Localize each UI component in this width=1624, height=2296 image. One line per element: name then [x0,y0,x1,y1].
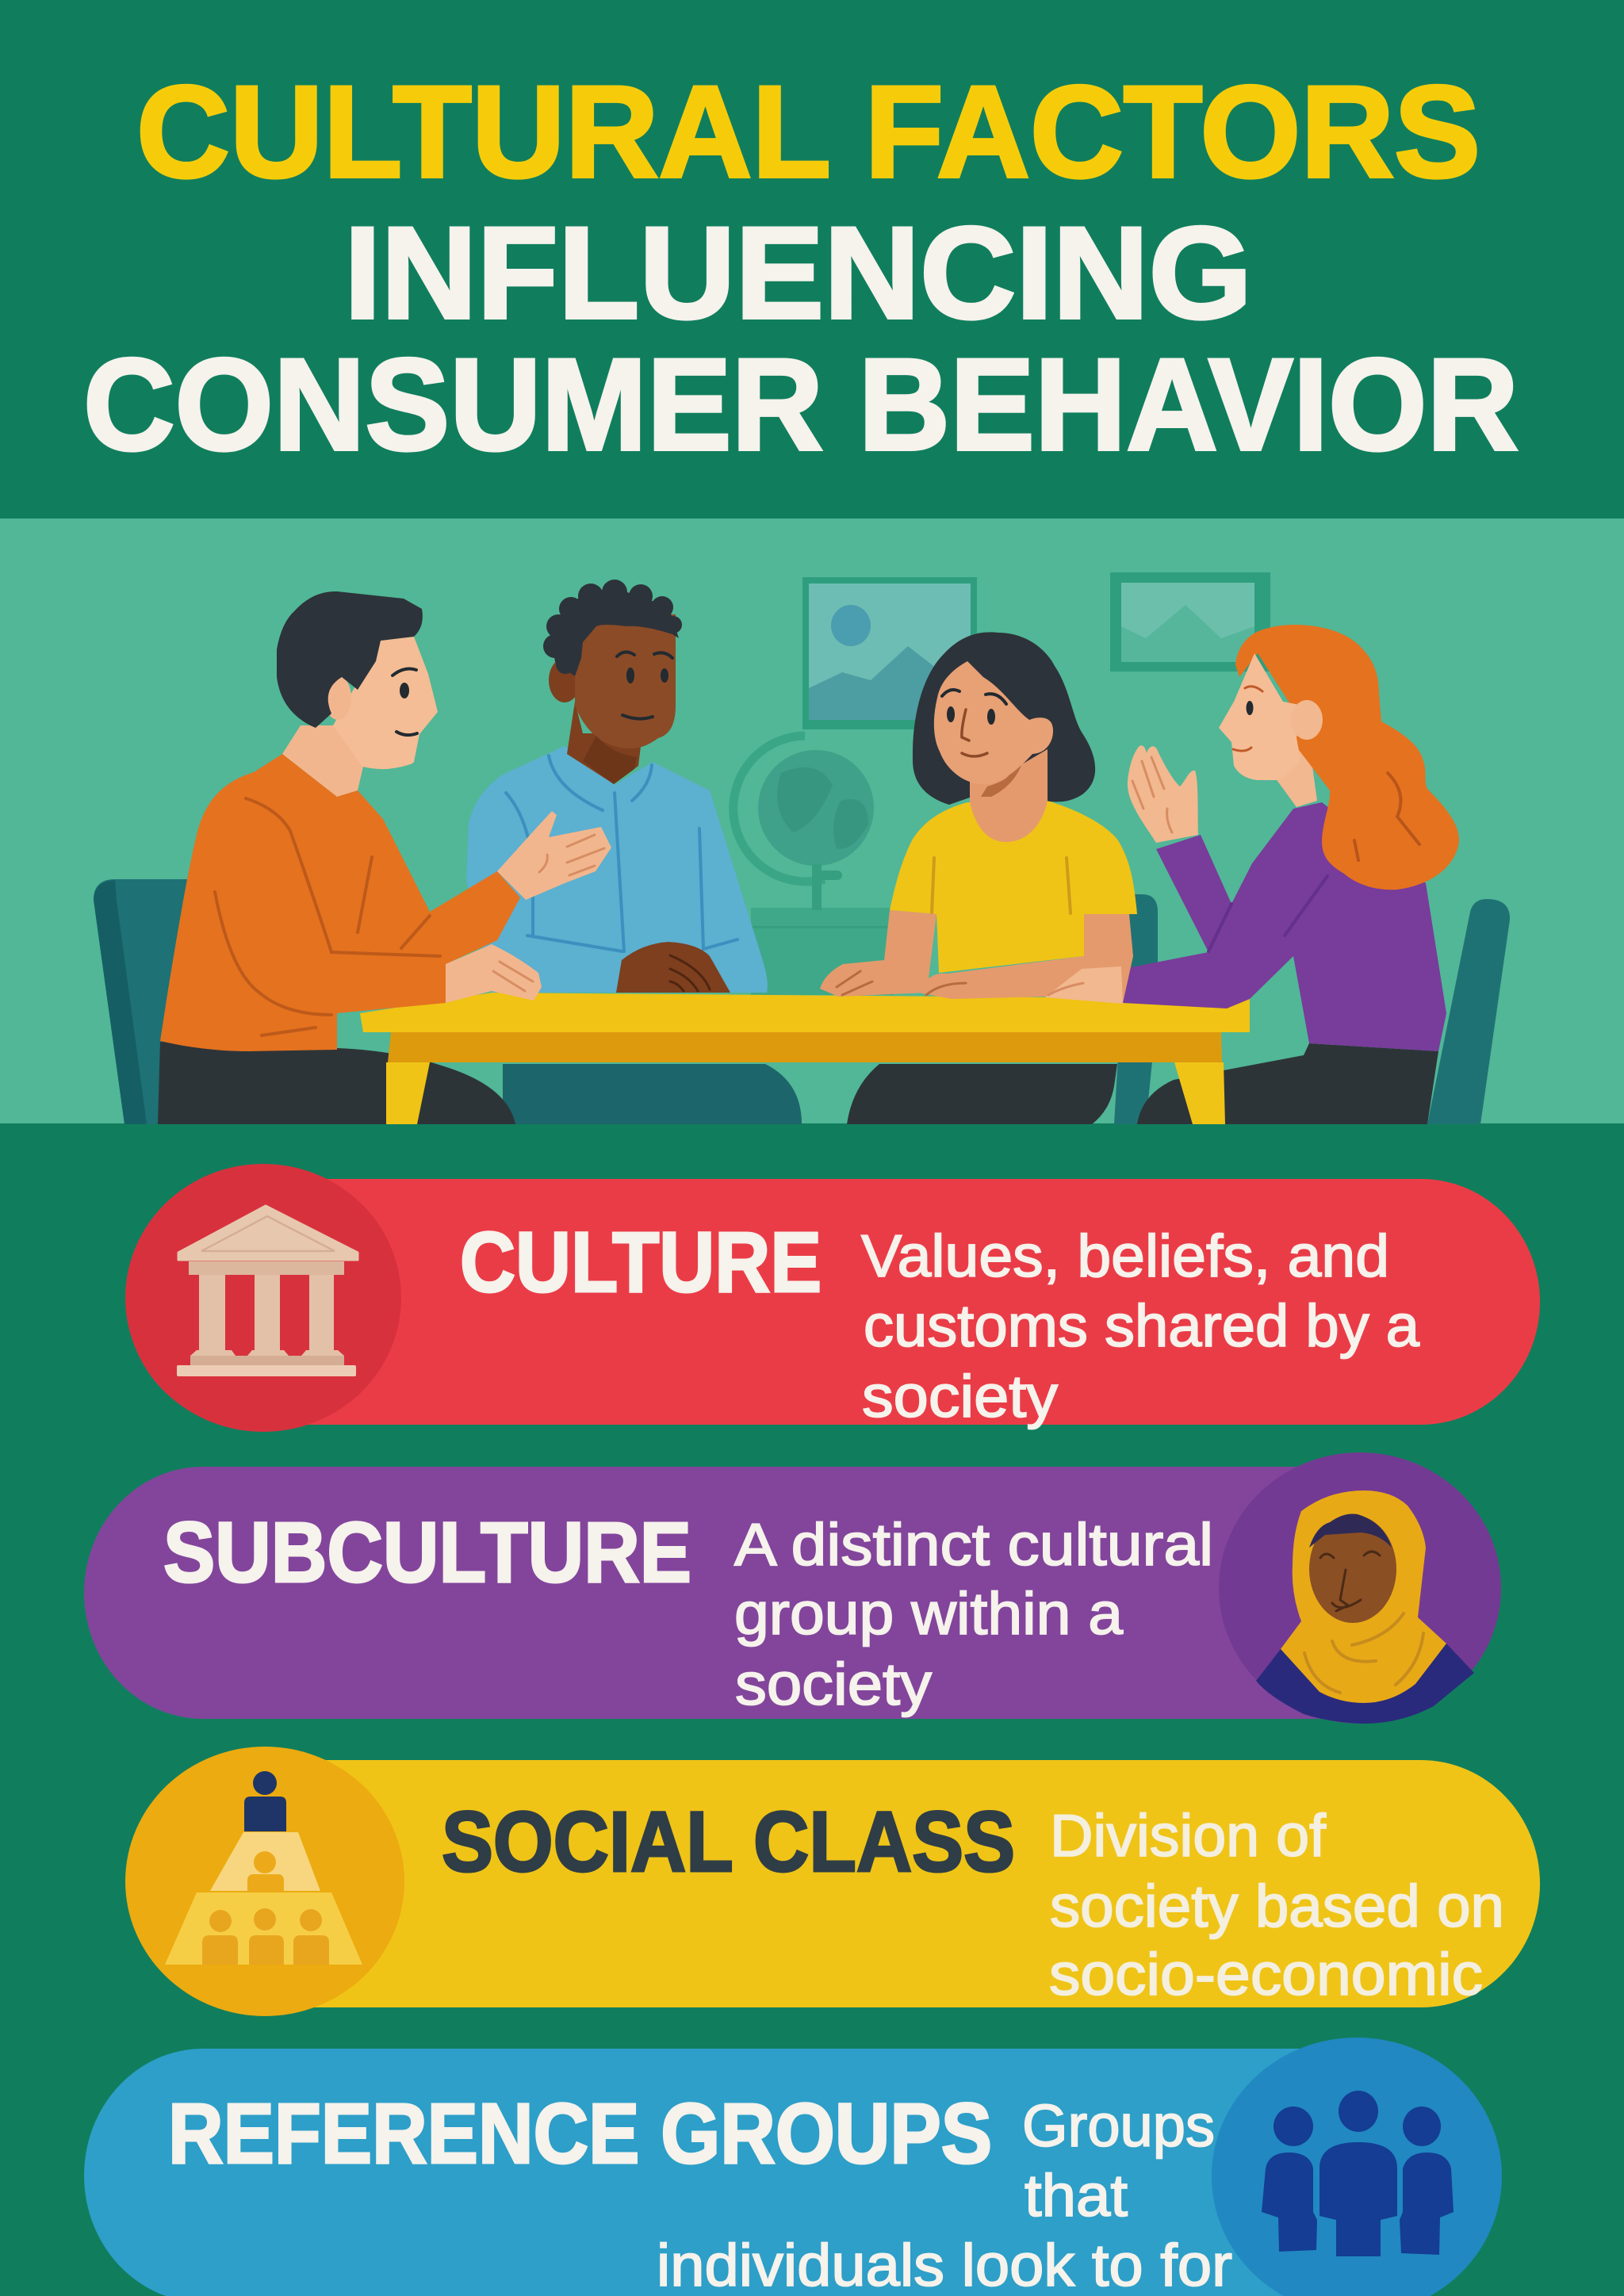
curly hair [543,580,682,676]
person three: woman in yellow shirt (body) [890,801,1137,973]
description: Division of [1050,1802,1326,1869]
factor card: culture [125,1164,1540,1432]
orange sweater [160,754,520,1051]
blue pill [84,2049,1432,2296]
neck and head [567,702,642,784]
label: REFERENCE GROUPS [168,2085,992,2181]
title [83,59,1519,477]
person four: woman in purple top (body) [1123,802,1446,1051]
trousers: person one [158,1042,515,1124]
person one: man in orange sweater [160,591,611,1051]
neck and hand [1269,737,1317,807]
red pill [127,1179,1540,1425]
blue shirt [466,746,768,993]
factor card: reference groups [84,2038,1502,2296]
person two: man in blue shirt [466,580,768,993]
icon: classical temple [125,1164,401,1432]
hair [913,632,1095,805]
description: Groups [1022,2092,1215,2159]
label: SOCIAL CLASS [442,1793,1015,1889]
title: INFLUENCING [344,200,1252,346]
wall picture: mountain [1110,572,1270,672]
left arm and hand [820,910,936,997]
description: society based on [1050,1873,1504,1939]
face [1219,653,1304,780]
description [1049,1802,1504,2007]
hair [277,591,423,728]
description: Values, beliefs, and [861,1223,1389,1289]
globe on cabinet [733,736,894,995]
person two: clasped hands [616,942,730,993]
neck [970,749,1048,842]
title: CULTURAL FACTORS [136,59,1480,205]
right chair [1427,899,1510,1124]
label: CULTURE [460,1214,822,1310]
person four: woman head, hair and hand [1045,625,1459,1004]
description [861,1223,1419,1429]
description: socio-economic [1049,1941,1483,2007]
middle chair [1114,894,1158,1124]
yellow pill [127,1760,1540,2007]
icon: social pyramid [125,1747,404,2016]
trousers: person three [847,1064,1117,1124]
factor card: social class [125,1747,1540,2016]
purple pill [84,1467,1432,1719]
description [657,2092,1232,2296]
title: CONSUMER BEHAVIOR [83,331,1519,477]
wall picture: sun and mountains [802,577,977,729]
neck and head [282,725,373,797]
description: society [862,1363,1059,1429]
trousers: person two [503,1064,802,1124]
description: society [735,1651,933,1717]
table [360,993,1250,1124]
description [734,1511,1213,1717]
orange hair back [1235,625,1459,890]
description: that [1025,2162,1128,2229]
description: customs shared by a [864,1292,1419,1359]
right arm and hand [918,914,1133,1003]
resting hand [446,944,542,1003]
description: A distinct cultural [734,1511,1213,1578]
person three: woman head and arms [820,632,1133,1003]
face [934,661,1053,784]
icon: woman in hijab [1219,1452,1501,1724]
label: SUBCULTURE [163,1504,691,1600]
factor card: subculture [84,1452,1501,1724]
illustration: four people talking around a table [0,519,1624,1124]
trousers: person four [1137,1043,1438,1124]
icon: three people [1212,2038,1502,2296]
description: group within a [734,1580,1123,1647]
raised hand [497,811,611,900]
left chair [94,879,190,1124]
